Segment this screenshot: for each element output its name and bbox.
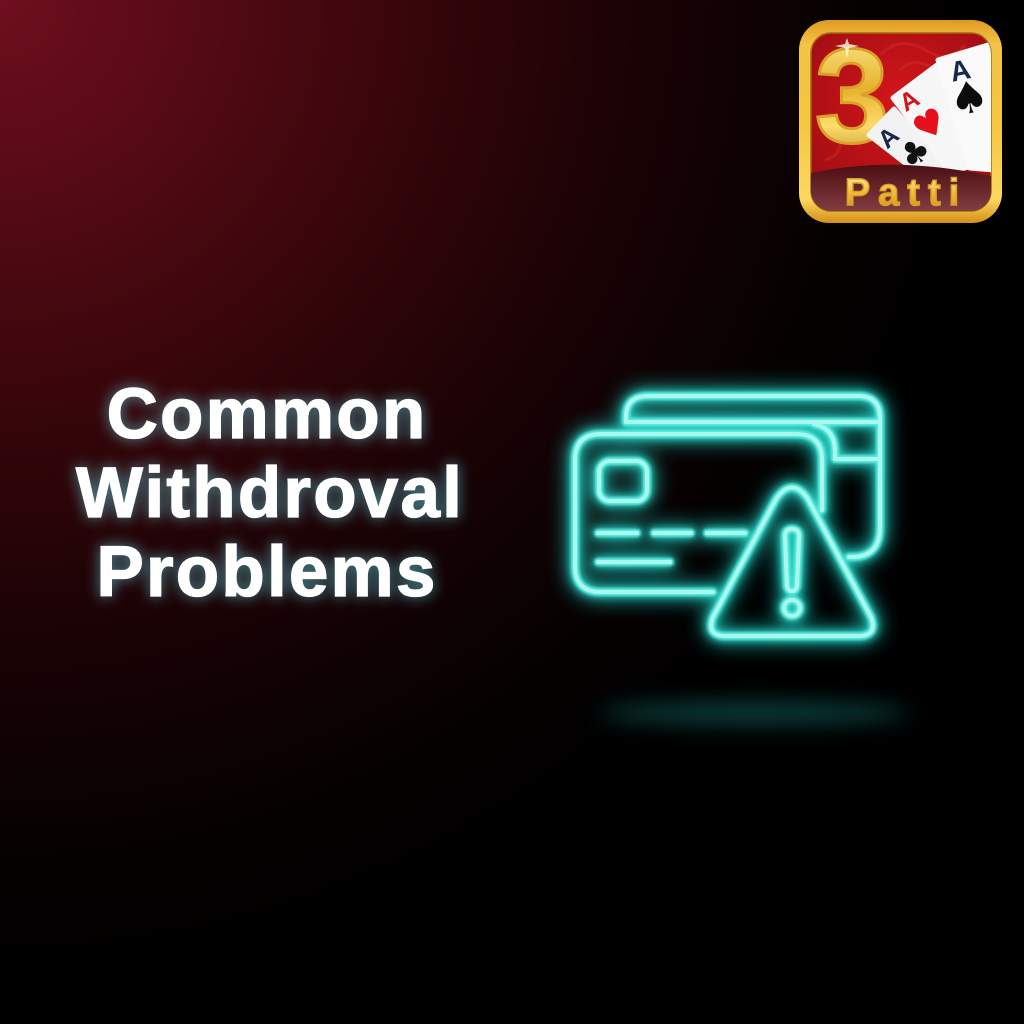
- title text lines: Problems: [96, 533, 438, 612]
- reflection glow under the icon: [600, 702, 910, 724]
- infographic canvas: [67, 20, 1002, 736]
- logo wordmark: Patti: [845, 172, 967, 214]
- card: ace of clubs: ♣: [891, 128, 939, 177]
- logo red panel ornament: [820, 44, 965, 160]
- title glow: Common: [107, 375, 427, 454]
- title text lines: Withdroval: [76, 454, 464, 533]
- title glow: Withdroval: [76, 454, 464, 533]
- logo sparkle: [835, 38, 859, 58]
- logo maroon band: [811, 165, 991, 211]
- title: Common Withdroval Problems: [76, 375, 464, 612]
- title text lines: Common: [107, 375, 427, 454]
- title glow: Problems: [96, 533, 438, 612]
- card: ace of hearts: A: [895, 84, 924, 118]
- logo: 3 Patti app icon: [799, 20, 1002, 223]
- icon: neon credit cards with warning triangle: [575, 396, 880, 636]
- logo gold frame: [799, 20, 1002, 223]
- title glow: [76, 375, 464, 612]
- card: ace of spades: A: [947, 53, 973, 88]
- logo numeral 3: 3: [815, 22, 889, 171]
- card: ace of clubs: A: [873, 121, 905, 154]
- logo playing cards: [811, 45, 995, 211]
- logo red panel: [811, 33, 991, 211]
- card: ace of hearts: ♥: [906, 99, 955, 151]
- card: ace of spades: [938, 45, 995, 170]
- card: ace of hearts: [893, 65, 972, 172]
- title text lines: [76, 375, 464, 612]
- card: ace of spades: ♠: [945, 70, 993, 127]
- card: ace of clubs: [866, 106, 944, 168]
